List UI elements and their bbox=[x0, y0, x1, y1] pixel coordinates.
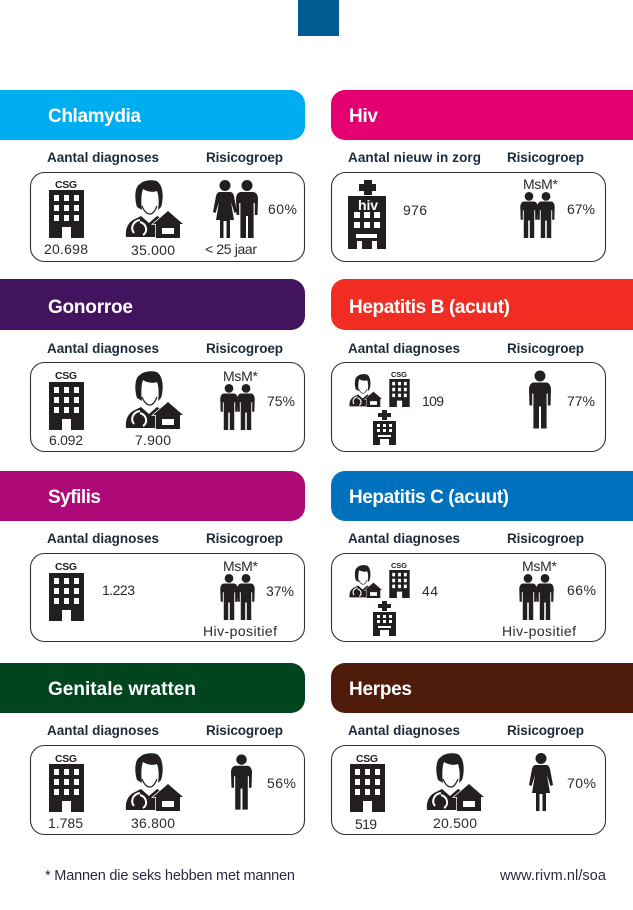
Herpes column labels bbox=[348, 723, 584, 738]
Gonorroe GP count: 7.900 bbox=[135, 432, 171, 448]
Gonorroe data box bbox=[30, 362, 304, 452]
Gonorroe column labels: Aantal diagnoses bbox=[47, 341, 159, 356]
Hepatitis B count: 109 bbox=[422, 393, 444, 409]
Herpes column labels: Aantal diagnoses bbox=[348, 723, 460, 738]
icon: two men, MSM bbox=[220, 368, 259, 430]
top tab bbox=[298, 0, 339, 36]
icon: two men, MSM: MsM* bbox=[223, 368, 259, 384]
icon: CSG building bbox=[49, 561, 84, 621]
icon: woman bbox=[529, 753, 553, 811]
Chlamydia CSG count: 20.698 bbox=[44, 241, 88, 257]
Chlamydia column labels: Aantal diagnoses bbox=[47, 150, 159, 165]
Herpes CSG count: 519 bbox=[355, 816, 377, 832]
icon: CSG building bbox=[389, 561, 410, 598]
Gonorroe header bbox=[0, 279, 305, 330]
Chlamydia column labels: Risicogroep bbox=[206, 150, 283, 165]
Genitale wratten column labels: Risicogroep bbox=[206, 723, 283, 738]
panel: Chlamydia bbox=[0, 90, 305, 262]
icon: two men, MSM bbox=[520, 176, 559, 238]
icon: CSG building bbox=[49, 370, 84, 430]
Herpes GP count: 20.500 bbox=[433, 815, 477, 831]
Hepatitis C column labels bbox=[348, 531, 584, 546]
website link: www.rivm.nl/soa bbox=[499, 868, 607, 884]
panel: Gonorroe bbox=[0, 279, 305, 452]
Gonorroe header: Gonorroe bbox=[48, 297, 133, 318]
panel: Hepatitis C bbox=[331, 471, 633, 642]
icon: CSG building: CSG bbox=[356, 753, 378, 765]
icon: doctor with house bbox=[427, 753, 484, 811]
panel: Hepatitis B bbox=[331, 279, 633, 452]
Genitale wratten percentage: 56% bbox=[267, 775, 296, 791]
icon: hiv hospital: hiv bbox=[358, 197, 378, 213]
panel: Genitale wratten bbox=[0, 663, 305, 834]
Hiv percentage: 67% bbox=[567, 201, 595, 217]
Hepatitis B column labels: Aantal diagnoses bbox=[348, 341, 460, 356]
Hiv header bbox=[331, 90, 633, 140]
icon: doctor with house bbox=[349, 374, 382, 407]
icon: doctor with house bbox=[126, 180, 183, 238]
Chlamydia data box bbox=[30, 172, 304, 262]
Hepatitis B column labels bbox=[348, 341, 584, 356]
Gonorroe column labels: Risicogroep bbox=[206, 341, 283, 356]
Syfilis count: 1.223 bbox=[102, 582, 135, 598]
Herpes header bbox=[331, 663, 633, 713]
Genitale wratten GP count: 36.800 bbox=[131, 815, 175, 831]
icon: hospital bbox=[373, 601, 396, 636]
icon: man bbox=[529, 370, 551, 428]
icon: two men, MSM: MsM* bbox=[523, 176, 559, 192]
Syfilis percentage: 37% bbox=[266, 583, 294, 599]
Hepatitis B percentage: 77% bbox=[567, 393, 595, 409]
Genitale wratten column labels: Aantal diagnoses bbox=[47, 723, 159, 738]
Herpes data box bbox=[332, 746, 606, 834]
Syfilis column labels bbox=[47, 531, 283, 546]
Gonorroe percentage: 75% bbox=[267, 393, 295, 409]
Genitale wratten header bbox=[0, 663, 305, 713]
Chlamydia GP count: 35.000 bbox=[131, 242, 175, 258]
Genitale wratten data box bbox=[30, 746, 304, 834]
Hiv column labels: Aantal nieuw in zorg bbox=[348, 150, 481, 165]
icon: woman and man bbox=[213, 180, 258, 238]
Hepatitis C column labels: Risicogroep bbox=[507, 531, 584, 546]
panel: Syfilis bbox=[0, 471, 305, 642]
icon: doctor with house bbox=[349, 565, 382, 598]
Hepatitis C risk group: Hiv-positief bbox=[502, 623, 576, 639]
icon: CSG building bbox=[350, 753, 385, 812]
icon: hospital bbox=[373, 410, 396, 445]
footnote: * Mannen die seks hebben met mannen bbox=[45, 868, 295, 884]
Syfilis header: Syfilis bbox=[48, 487, 101, 508]
Chlamydia header bbox=[0, 90, 305, 140]
Hepatitis B header: Hepatitis B (acuut) bbox=[349, 297, 510, 318]
Gonorroe CSG count: 6.092 bbox=[49, 432, 83, 448]
icon: CSG building bbox=[49, 179, 84, 238]
icon: CSG building: CSG bbox=[391, 370, 407, 379]
icon: two men, MSM: MsM* bbox=[522, 558, 558, 574]
Hiv column labels: Risicogroep bbox=[507, 150, 584, 165]
Gonorroe column labels bbox=[47, 341, 283, 356]
Hepatitis C data box bbox=[332, 554, 606, 642]
Chlamydia percentage: 60% bbox=[268, 201, 297, 217]
icon: hiv hospital bbox=[348, 180, 386, 249]
icon: CSG building bbox=[49, 753, 84, 812]
Hepatitis C count: 44 bbox=[422, 583, 438, 599]
icon: CSG building: CSG bbox=[391, 561, 407, 570]
Hepatitis B data box bbox=[332, 362, 606, 452]
icon: two men, MSM: MsM* bbox=[223, 558, 259, 574]
icon: CSG building: CSG bbox=[55, 370, 77, 382]
Syfilis risk group: Hiv-positief bbox=[203, 623, 277, 639]
icon: two men, MSM bbox=[220, 558, 259, 620]
Syfilis header bbox=[0, 471, 305, 521]
Hepatitis C column labels: Aantal diagnoses bbox=[348, 531, 460, 546]
Syfilis column labels: Aantal diagnoses bbox=[47, 531, 159, 546]
Hiv column labels bbox=[348, 150, 584, 165]
Chlamydia header: Chlamydia bbox=[48, 106, 141, 127]
Hepatitis C header bbox=[331, 471, 633, 521]
icon: CSG building bbox=[389, 370, 410, 407]
Genitale wratten column labels bbox=[47, 723, 283, 738]
icon: two men, MSM bbox=[519, 558, 558, 620]
Hiv data box bbox=[332, 172, 606, 262]
icon: doctor with house bbox=[126, 753, 183, 811]
Hepatitis C percentage: 66% bbox=[567, 582, 596, 598]
Hepatitis C header: Hepatitis C (acuut) bbox=[349, 487, 509, 508]
icon: CSG building: CSG bbox=[55, 753, 77, 765]
Hepatitis B column labels: Risicogroep bbox=[507, 341, 584, 356]
Hiv header: Hiv bbox=[349, 106, 378, 127]
Herpes percentage: 70% bbox=[567, 775, 596, 791]
Hiv count: 976 bbox=[403, 202, 427, 218]
icon: doctor with house bbox=[126, 371, 183, 429]
Syfilis column labels: Risicogroep bbox=[206, 531, 283, 546]
Genitale wratten CSG count: 1.785 bbox=[48, 815, 83, 831]
Herpes column labels: Risicogroep bbox=[507, 723, 584, 738]
Chlamydia risk group: < 25 jaar bbox=[205, 241, 257, 257]
icon: CSG building: CSG bbox=[55, 179, 77, 191]
Syfilis data box bbox=[30, 554, 304, 642]
icon: man bbox=[231, 754, 252, 810]
Hepatitis B header bbox=[331, 279, 633, 330]
panel: Herpes bbox=[331, 663, 633, 834]
Chlamydia column labels bbox=[47, 150, 283, 165]
icon: CSG building: CSG bbox=[55, 561, 77, 573]
Herpes header: Herpes bbox=[349, 679, 412, 700]
Genitale wratten header: Genitale wratten bbox=[48, 679, 196, 700]
panel: Hiv bbox=[331, 90, 633, 262]
